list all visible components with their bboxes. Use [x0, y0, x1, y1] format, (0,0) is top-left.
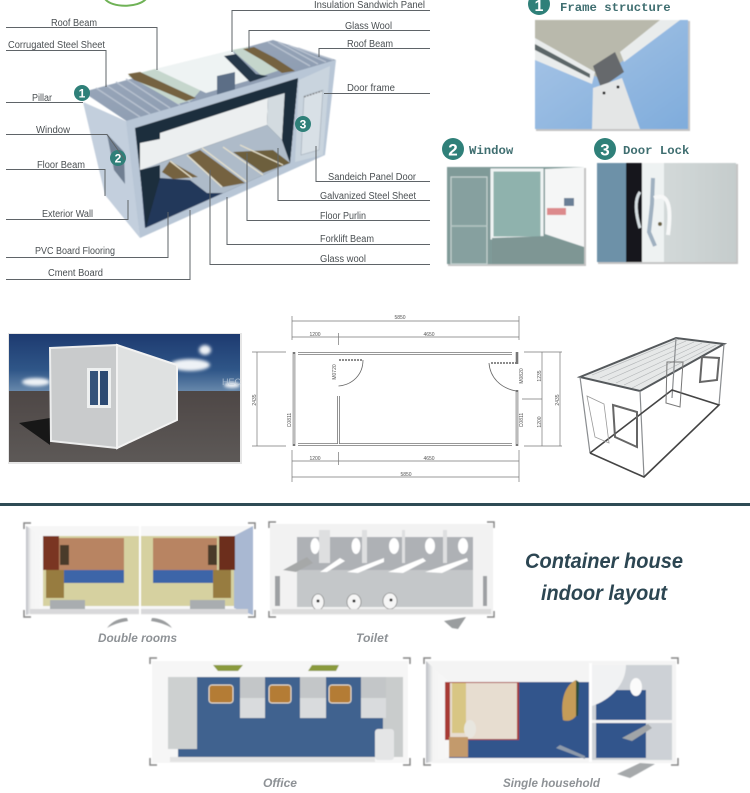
house window [87, 368, 111, 408]
floor plan drawing: C0811 [287, 413, 293, 427]
left callouts: Cment Board [48, 268, 103, 279]
photo: frame structure [535, 20, 690, 131]
heading: container house indoor layout: indoor layout [541, 582, 668, 605]
right callouts: Door frame [347, 83, 395, 94]
door panel [295, 66, 330, 162]
photo: door lock [597, 163, 738, 264]
right callouts: Floor Purlin [320, 211, 366, 222]
room layout: toilet [269, 522, 494, 629]
right callouts: Roof Beam [347, 39, 393, 50]
numbered markers: 1 [79, 86, 86, 100]
right callouts: Glass Wool [345, 21, 392, 32]
heading: door lock: 3 [600, 140, 610, 160]
room captions: upper row [98, 631, 389, 645]
room captions: upper row: Toilet [356, 631, 389, 645]
floor plan drawing: 4650 [423, 332, 435, 338]
section divider [0, 503, 750, 506]
floor plan drawing: C0811 [519, 413, 525, 427]
walls [294, 352, 517, 446]
room layout: double rooms [24, 523, 255, 628]
floor plan drawing: 5850 [400, 472, 412, 478]
floor plan drawing: 1200 [537, 416, 543, 428]
floor plan drawing [252, 315, 562, 482]
left callouts: Window [36, 125, 71, 136]
room captions: upper row: Double rooms [98, 631, 177, 645]
front frame [126, 60, 336, 238]
heading: window [442, 138, 514, 160]
container left wall [83, 102, 140, 238]
iso windows and doors [587, 357, 719, 447]
heading: door lock [594, 138, 690, 160]
right callouts: Sandeich Panel Door [328, 172, 417, 183]
floor plan drawing: M0820 [519, 368, 525, 384]
heading: container house indoor layout [525, 550, 683, 605]
left callouts: Exterior Wall [42, 209, 93, 220]
photo: window [447, 167, 586, 266]
floor plan drawing: 1200 [309, 332, 321, 338]
right callouts [210, 0, 430, 265]
door swings [338, 360, 516, 391]
floor plan drawing: 2435 [252, 394, 258, 406]
photo: house exterior [8, 333, 242, 464]
room captions: lower row [263, 776, 601, 790]
floor plan drawing: 1235 [537, 370, 543, 382]
room layout: office [150, 658, 410, 765]
logo arc fragment [105, 0, 146, 6]
house side face [117, 345, 177, 448]
side window [107, 134, 125, 184]
floor plan drawing: 1200 [309, 456, 321, 462]
numbered markers: 3 [300, 118, 307, 132]
right callouts: Insulation Sandwich Panel [314, 0, 425, 11]
floor plan drawing: M0720 [332, 364, 338, 380]
container roof [83, 40, 336, 122]
heading: container house indoor layout: Container house [525, 550, 683, 573]
cutaway container diagram [83, 40, 336, 238]
left callouts: Corrugated Steel Sheet [8, 40, 105, 51]
right callouts: Forklift Beam [320, 234, 374, 245]
floor plan drawing: 4650 [423, 456, 435, 462]
floor plan drawing: 5850 [394, 315, 406, 321]
left callouts: Roof Beam [51, 18, 97, 29]
right callouts: Galvanized Steel Sheet [320, 191, 416, 202]
interior opening [135, 78, 298, 228]
left callouts [6, 18, 190, 280]
numbered markers [74, 85, 311, 166]
isometric frame drawing [580, 338, 724, 477]
heading: door lock: Door Lock [623, 144, 690, 158]
photo: house exterior: HEC [222, 377, 242, 387]
floor plan drawing: 2435 [555, 394, 561, 406]
heading: frame structure: Frame structure [560, 1, 671, 15]
right callouts: Glass wool [320, 254, 366, 265]
room layout: single household [424, 658, 678, 778]
left callouts: Pillar [32, 93, 53, 104]
heading: window: Window [469, 144, 514, 158]
numbered markers: 2 [115, 152, 122, 166]
left callouts: Floor Beam [37, 160, 85, 171]
house front face [50, 345, 117, 448]
room captions: lower row: Office [263, 776, 297, 790]
left callouts: PVC Board Flooring [35, 246, 115, 257]
heading: window: 2 [448, 140, 458, 160]
room captions: lower row: Single household [503, 776, 601, 790]
